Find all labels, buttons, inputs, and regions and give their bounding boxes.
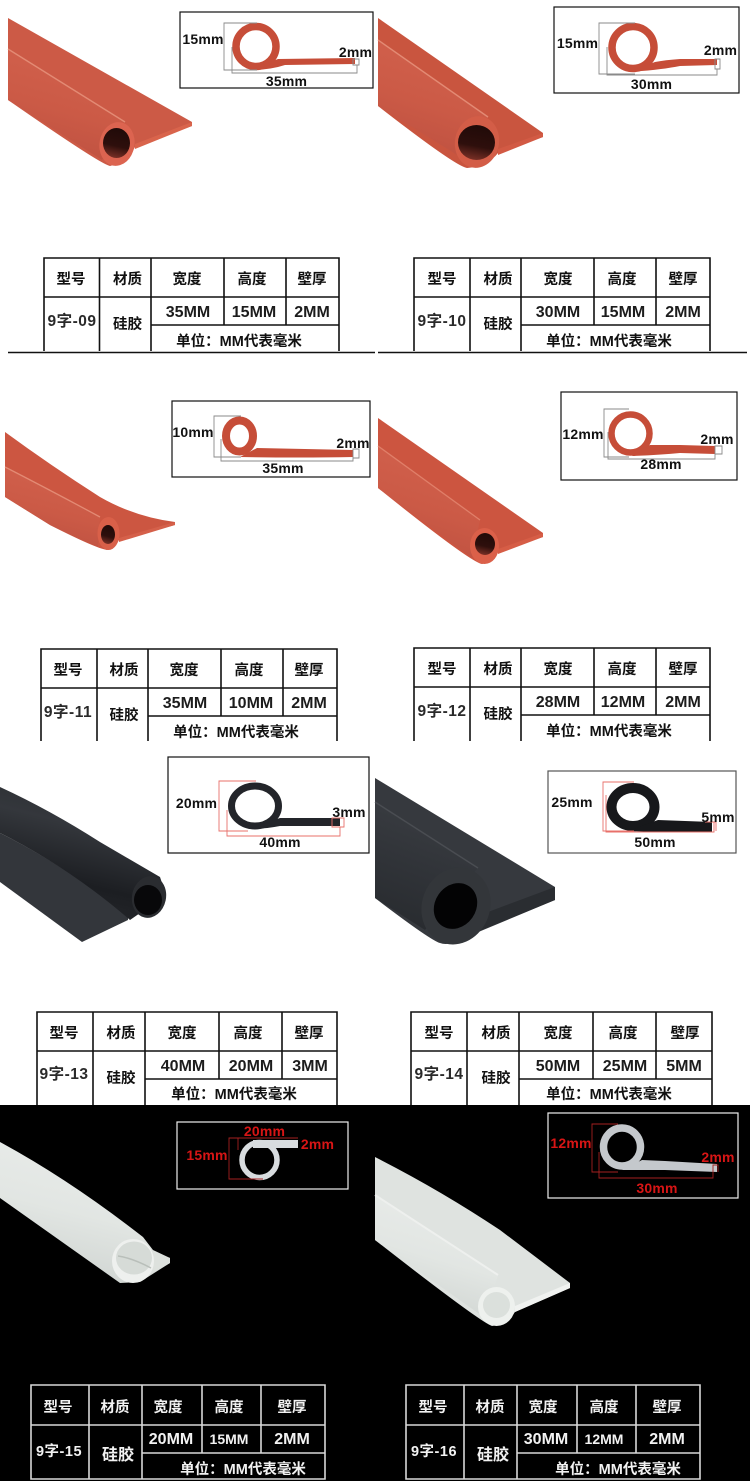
product photo: red strip 09 bbox=[8, 18, 192, 169]
cross-section diagram 10: 30mm bbox=[631, 76, 672, 92]
spec table 13: 40MM bbox=[161, 1058, 205, 1075]
panel: model 9字-14 bbox=[375, 771, 736, 1105]
spec table 12: 12MM bbox=[601, 694, 645, 711]
product photo: red strip 12 bbox=[378, 418, 543, 564]
product photo: black strip 14 bbox=[375, 778, 555, 954]
cross-section diagram 16 bbox=[548, 1113, 738, 1198]
spec table 11: 10MM bbox=[229, 695, 273, 712]
spec table 14: 单位：MM代表毫米 bbox=[546, 1085, 672, 1103]
cross-section diagram 16: 2mm bbox=[701, 1149, 735, 1165]
spec table 13: 单位：MM代表毫米 bbox=[171, 1085, 297, 1103]
cross-section diagram 13: 20mm bbox=[176, 795, 217, 811]
cross-section diagram 16: 30mm bbox=[636, 1180, 678, 1196]
spec table 10: 壁厚 bbox=[668, 270, 698, 288]
cross-section diagram 15: 15mm bbox=[186, 1147, 228, 1163]
spec table 09: 材质 bbox=[113, 270, 142, 288]
spec table 15: 壁厚 bbox=[278, 1398, 306, 1416]
cross-section diagram 14: 50mm bbox=[634, 834, 676, 850]
product photo: clear strip 15 bbox=[0, 1142, 170, 1283]
cross-section diagram 11: 10mm bbox=[172, 424, 214, 440]
spec table 11: 35MM bbox=[163, 695, 207, 712]
spec table 10: 2MM bbox=[665, 304, 701, 321]
spec table 16: 材质 bbox=[476, 1398, 504, 1416]
cross-section diagram 09 bbox=[180, 12, 373, 89]
spec table 10: 材质 bbox=[484, 270, 512, 288]
spec table 13: 3MM bbox=[292, 1058, 328, 1075]
spec table 15: 20MM bbox=[149, 1431, 193, 1448]
spec table 15: 硅胶 bbox=[102, 1445, 134, 1464]
spec table 13: 壁厚 bbox=[294, 1024, 324, 1042]
spec table 13: 高度 bbox=[234, 1024, 263, 1042]
panel: model 9字-13 bbox=[0, 757, 369, 1105]
spec table 16: 壁厚 bbox=[652, 1398, 682, 1416]
spec table 11: 硅胶 bbox=[110, 706, 139, 724]
cross-section diagram 15: 2mm bbox=[301, 1136, 334, 1152]
cross-section diagram 15 bbox=[177, 1122, 348, 1189]
spec table 11: 材质 bbox=[110, 661, 138, 679]
cross-section diagram 14: 25mm bbox=[551, 794, 593, 810]
spec table 10: 型号 bbox=[428, 271, 456, 288]
spec table 11: 壁厚 bbox=[294, 661, 324, 679]
cross-section diagram 14 bbox=[548, 771, 736, 853]
cross-section diagram 09: 35mm bbox=[266, 73, 307, 89]
cross-section diagram 11 bbox=[172, 401, 370, 477]
spec table 14: 高度 bbox=[608, 1024, 638, 1042]
spec table 13: 20MM bbox=[229, 1058, 273, 1075]
panel: model 9字-15 bbox=[0, 1122, 348, 1479]
spec table 12: 型号 bbox=[428, 661, 456, 678]
spec table 15: 9字-15 bbox=[36, 1442, 82, 1460]
spec table 15: 单位：MM代表毫米 bbox=[180, 1460, 306, 1478]
panel: model 9字-11 bbox=[5, 401, 370, 741]
product photo: red strip 11 bbox=[5, 432, 175, 550]
panel: model 9字-09 bbox=[8, 12, 373, 351]
spec table 14: 5MM bbox=[666, 1058, 702, 1075]
spec table 15: 高度 bbox=[214, 1398, 244, 1416]
spec table 16: 硅胶 bbox=[477, 1445, 509, 1464]
spec table 16: 9字-16 bbox=[411, 1442, 457, 1460]
spec table 09: 9字-09 bbox=[47, 311, 97, 330]
cross-section diagram 09: 2mm bbox=[339, 44, 372, 60]
spec table 09: 壁厚 bbox=[298, 270, 326, 288]
spec table 11: 9字-11 bbox=[44, 702, 92, 721]
spec table 14 bbox=[411, 1012, 712, 1105]
spec table 14: 25MM bbox=[603, 1058, 647, 1075]
spec table 12: 2MM bbox=[665, 694, 701, 711]
spec table 11: 宽度 bbox=[170, 661, 199, 679]
spec table 10 bbox=[414, 258, 710, 351]
spec table 16: 12MM bbox=[585, 1431, 623, 1447]
spec table 09: 高度 bbox=[238, 270, 267, 288]
spec table 15 bbox=[31, 1385, 325, 1479]
cross-section diagram 12 bbox=[561, 392, 737, 480]
spec table 12: 单位：MM代表毫米 bbox=[546, 722, 672, 740]
cross-section diagram 10 bbox=[554, 7, 739, 93]
cross-section diagram 09: 15mm bbox=[182, 31, 224, 47]
spec table 09: 35MM bbox=[166, 304, 210, 321]
spec table 15: 2MM bbox=[274, 1431, 310, 1448]
spec table 11: 型号 bbox=[54, 662, 82, 679]
cross-section diagram 13 bbox=[168, 757, 369, 853]
spec table 11: 2MM bbox=[291, 695, 327, 712]
spec table 16: 宽度 bbox=[528, 1398, 558, 1416]
product photo: clear strip 16 bbox=[375, 1157, 570, 1326]
spec table 12 bbox=[414, 648, 710, 741]
spec table 10: 30MM bbox=[536, 304, 580, 321]
spec table 13: 型号 bbox=[50, 1025, 78, 1042]
spec table 13: 材质 bbox=[106, 1024, 136, 1042]
cross-section diagram 11: 35mm bbox=[262, 460, 304, 476]
spec table 09: 2MM bbox=[294, 304, 330, 321]
spec table 10: 15MM bbox=[601, 304, 645, 321]
cross-section diagram 16: 12mm bbox=[550, 1135, 592, 1151]
spec table 11 bbox=[41, 649, 337, 741]
product photo: red strip 10 bbox=[378, 18, 543, 172]
spec table 14: 硅胶 bbox=[482, 1069, 511, 1087]
spec table 10: 单位：MM代表毫米 bbox=[546, 332, 672, 350]
spec table 09 bbox=[44, 258, 339, 351]
cross-section diagram 13: 40mm bbox=[259, 834, 301, 850]
spec table 14: 壁厚 bbox=[670, 1024, 700, 1042]
cross-section diagram 10: 2mm bbox=[704, 42, 737, 58]
spec table 15: 材质 bbox=[100, 1398, 130, 1416]
spec table 13: 硅胶 bbox=[106, 1069, 136, 1087]
spec table 16 bbox=[406, 1385, 700, 1479]
spec table 14: 50MM bbox=[536, 1058, 580, 1075]
dark background panel bbox=[0, 1105, 750, 1481]
spec table 15: 15MM bbox=[210, 1431, 248, 1447]
spec table 09: 单位：MM代表毫米 bbox=[176, 332, 302, 350]
spec table 09: 型号 bbox=[56, 271, 86, 288]
spec table 14: 宽度 bbox=[544, 1024, 573, 1042]
cross-section diagram 14: 5mm bbox=[701, 809, 735, 825]
cross-section diagram 12: 2mm bbox=[700, 431, 734, 447]
spec table 13: 宽度 bbox=[168, 1024, 197, 1042]
spec table 16: 30MM bbox=[524, 1431, 568, 1448]
spec table 15: 型号 bbox=[44, 1399, 72, 1416]
spec table 16: 2MM bbox=[649, 1431, 685, 1448]
spec table 14: 型号 bbox=[424, 1025, 454, 1042]
spec table 14: 9字-14 bbox=[414, 1064, 464, 1083]
cross-section diagram 10: 15mm bbox=[557, 35, 598, 51]
product photo: black strip 13 bbox=[0, 787, 170, 942]
spec table 12: 28MM bbox=[536, 694, 580, 711]
spec table 12: 9字-12 bbox=[417, 701, 467, 720]
cross-section diagram 11: 2mm bbox=[336, 435, 370, 451]
spec table 09: 宽度 bbox=[172, 270, 202, 288]
spec table 12: 宽度 bbox=[544, 660, 573, 678]
spec table 12: 材质 bbox=[484, 660, 512, 678]
spec table 11: 高度 bbox=[234, 661, 264, 679]
spec table 16: 单位：MM代表毫米 bbox=[555, 1460, 681, 1478]
spec table 16: 型号 bbox=[418, 1399, 448, 1416]
cross-section diagram 12: 28mm bbox=[640, 456, 682, 472]
cross-section diagram 13: 3mm bbox=[332, 804, 366, 820]
spec table 09: 15MM bbox=[232, 304, 276, 321]
spec table 16: 高度 bbox=[590, 1398, 619, 1416]
spec table 10: 9字-10 bbox=[417, 311, 467, 330]
cross-section diagram 12: 12mm bbox=[562, 426, 604, 442]
spec table 13: 9字-13 bbox=[39, 1064, 89, 1083]
panel: model 9字-16 bbox=[375, 1113, 738, 1479]
spec table 14: 材质 bbox=[482, 1024, 510, 1042]
panel: model 9字-10 bbox=[378, 7, 739, 351]
spec table 13 bbox=[37, 1012, 337, 1105]
spec table 10: 宽度 bbox=[544, 270, 573, 288]
panel: model 9字-12 bbox=[378, 392, 737, 741]
cross-section diagram 15: 20mm bbox=[244, 1123, 285, 1139]
spec table 11: 单位：MM代表毫米 bbox=[173, 723, 299, 741]
spec table 12: 硅胶 bbox=[484, 705, 513, 723]
spec table 10: 高度 bbox=[608, 270, 637, 288]
spec table 09: 硅胶 bbox=[113, 315, 142, 333]
spec table 12: 高度 bbox=[608, 660, 637, 678]
spec table 15: 宽度 bbox=[154, 1398, 183, 1416]
row divider lines bbox=[8, 352, 747, 354]
spec table 12: 壁厚 bbox=[668, 660, 698, 678]
spec table 10: 硅胶 bbox=[484, 315, 513, 333]
